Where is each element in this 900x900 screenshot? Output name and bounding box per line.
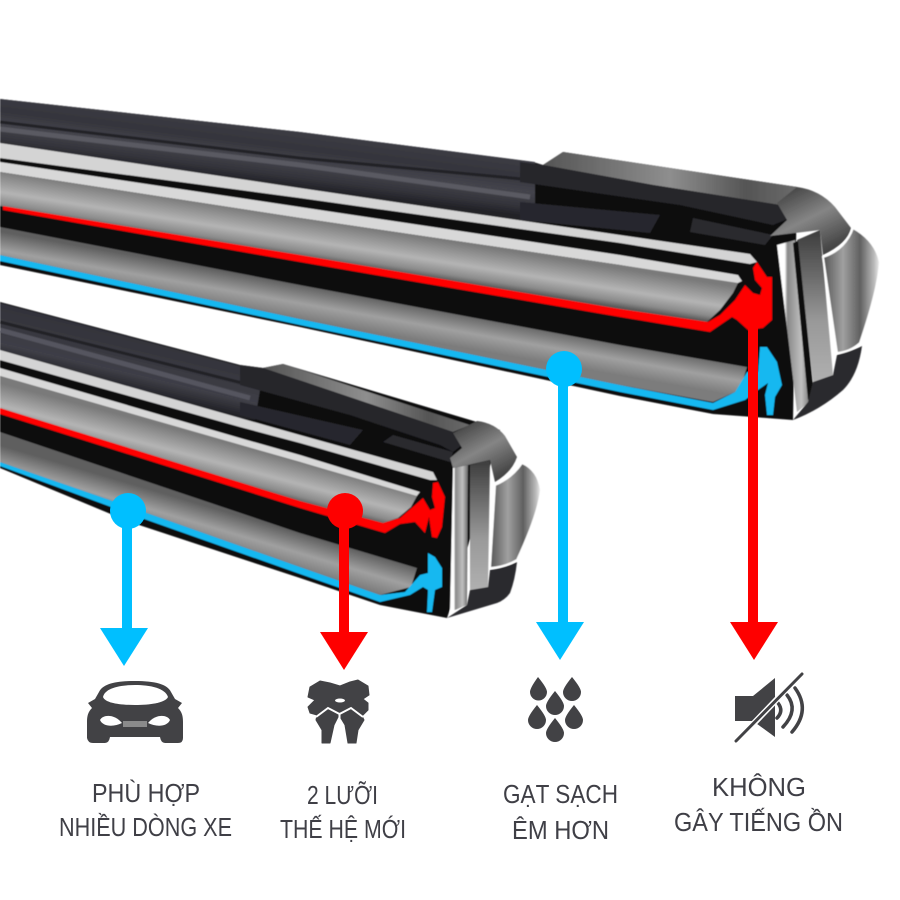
large end cap top: [770, 187, 851, 255]
small blade blue profile: [0, 462, 442, 612]
large side plate: [777, 240, 812, 412]
large inner plate: [797, 230, 833, 382]
large blade top band dark stripe: [0, 122, 533, 180]
small end cap top: [450, 421, 517, 482]
label: no noise: KHÔNG: [712, 772, 806, 802]
arrow: blue centre right: [536, 351, 584, 660]
small inner plate: [470, 460, 490, 590]
large blade rib bar: [520, 162, 790, 225]
small blade rib bar: [240, 365, 462, 452]
large blade lower clip: [520, 202, 660, 233]
large blade dark top band: [0, 99, 535, 222]
small blade top band light stripe: [0, 330, 250, 398]
large black plate stripe: [793, 241, 814, 400]
label: two new-generation blades: 2 LƯỠI: [307, 780, 378, 810]
small blade lower clip: [240, 402, 363, 445]
small blade light strip one: [0, 350, 437, 480]
large blade right clip: [690, 218, 773, 245]
small blade red profile: [0, 408, 445, 538]
label: two new-generation blades: [280, 780, 406, 844]
label: fits many cars: NHIỀU DÒNG XE: [59, 812, 232, 842]
large rubber end: [823, 228, 880, 353]
small end cap bottom: [447, 562, 517, 618]
large blade light strip two: [0, 162, 742, 284]
icon: muted speaker: [735, 672, 803, 743]
label: two new-generation blades: THẾ HỆ MỚI: [280, 814, 406, 844]
small blade upper rubber body: [0, 376, 417, 523]
label: fits many cars: [59, 778, 232, 842]
label: cleaner and smoother wipe: GẠT SẠCH: [503, 779, 618, 809]
small side plate: [450, 465, 468, 612]
icon: car: [87, 681, 183, 743]
label: cleaner and smoother wipe: ÊM HƠN: [512, 815, 609, 845]
small blade dark top band: [0, 303, 263, 420]
large blade lower rubber body: [0, 227, 747, 402]
label: fits many cars: PHÙ HỢP: [92, 778, 200, 808]
large blade light strip one: [0, 143, 757, 264]
arrow: blue left: [100, 493, 148, 666]
small blade lower rubber body: [0, 432, 417, 595]
large blade red profile: [3, 206, 772, 332]
large blade mount top: [543, 152, 797, 205]
large blade top band light stripe: [0, 129, 530, 197]
large blade black silhouette: [0, 99, 797, 420]
small blade black silhouette: [0, 302, 500, 618]
icon: double blade profile: [308, 680, 369, 745]
label: cleaner and smoother wipe: [503, 779, 618, 845]
small blade right clip: [383, 435, 453, 462]
small wiper blade: [0, 302, 541, 618]
arrow: red centre left: [320, 493, 368, 670]
large wiper blade: [0, 99, 880, 420]
small rubber end: [490, 463, 541, 568]
small blade top band dark stripe: [0, 322, 250, 385]
small blade light strip two: [0, 368, 420, 497]
arrow: red right: [730, 320, 778, 660]
small blade mount top: [263, 364, 470, 432]
large blade blue profile: [0, 255, 782, 415]
label: no noise: GÂY TIẾNG ỒN: [674, 807, 843, 837]
large blade upper rubber body: [0, 172, 738, 322]
label: no noise: [674, 772, 843, 837]
large end cap bottom: [793, 346, 862, 420]
icon: water drops: [528, 677, 583, 742]
